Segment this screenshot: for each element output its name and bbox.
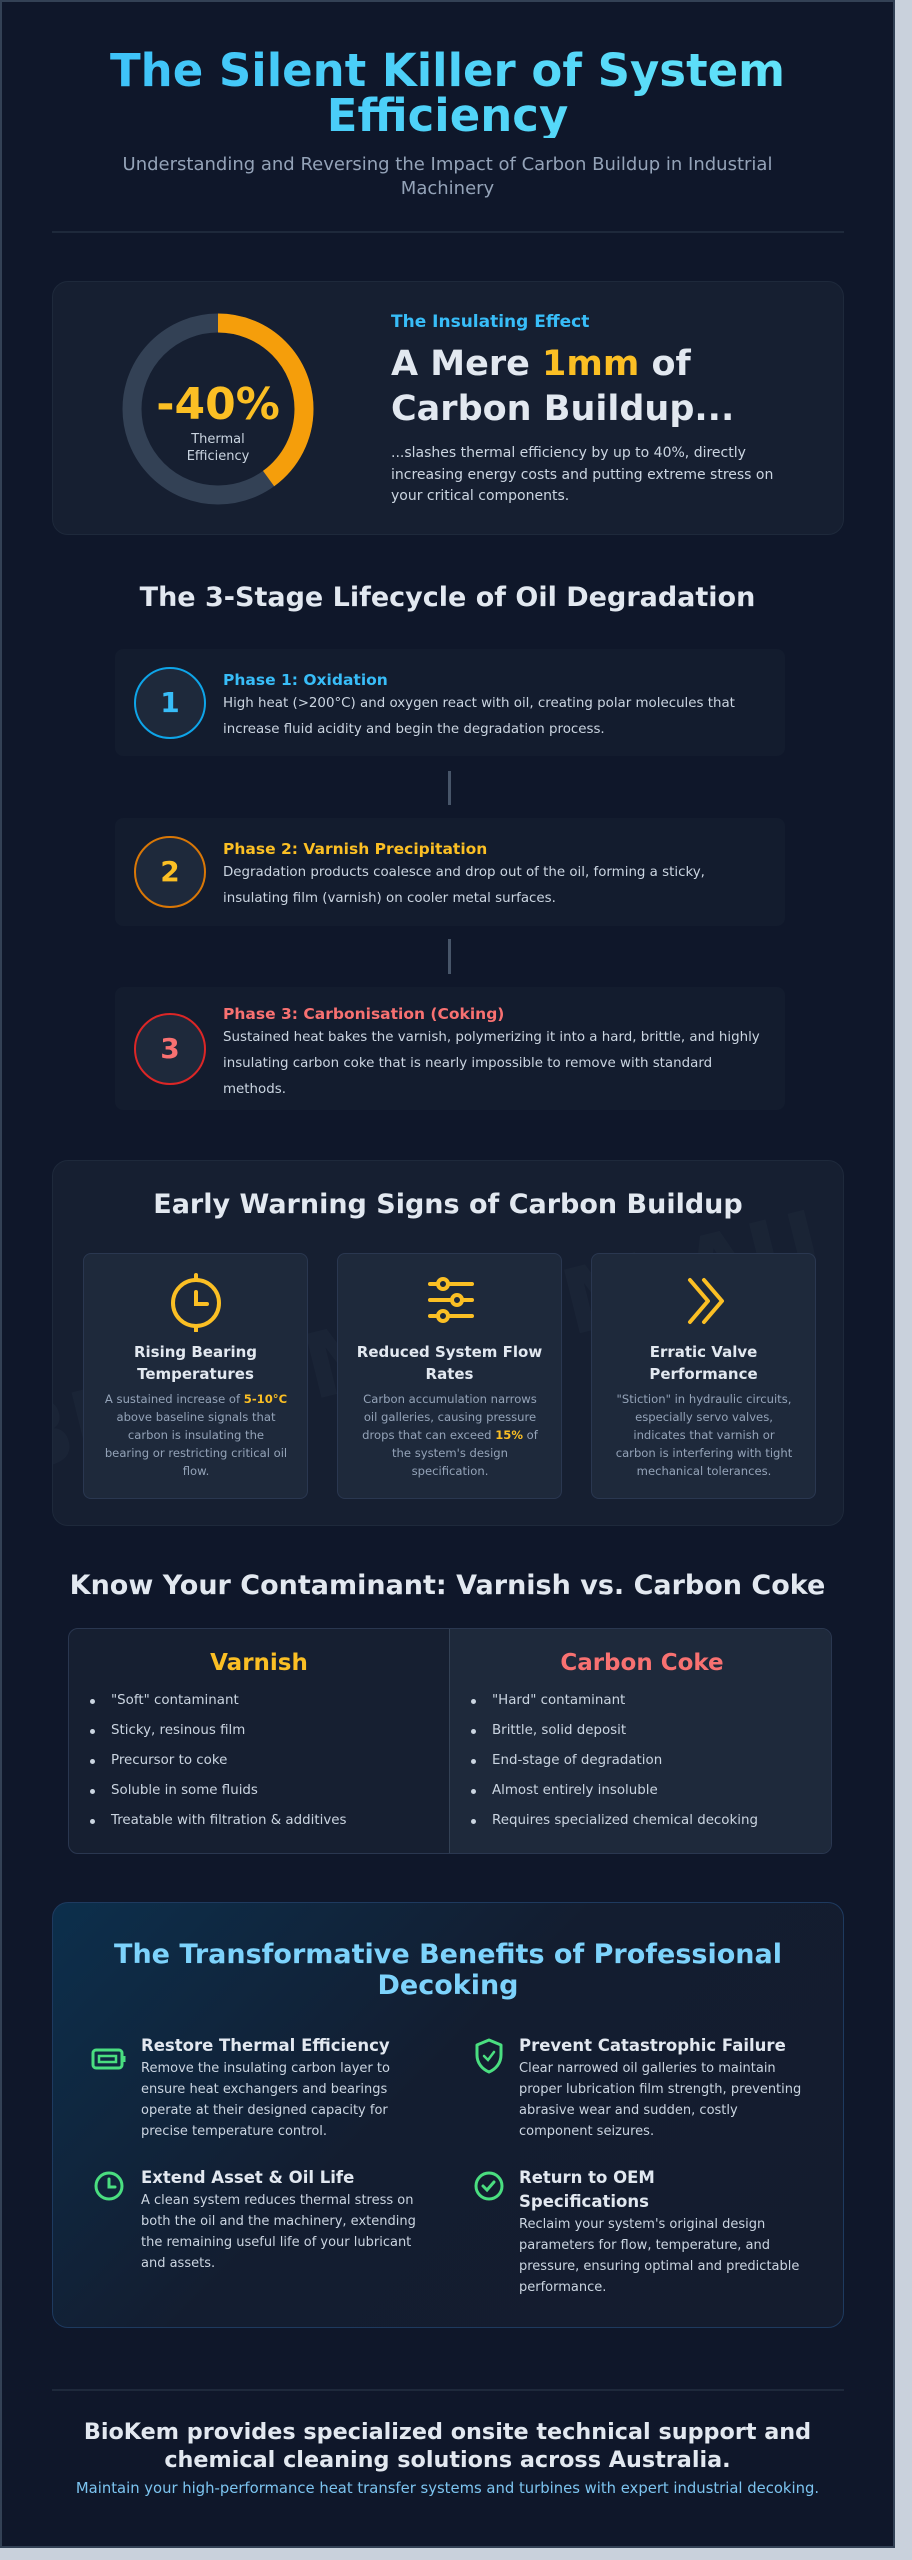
panel: warning signs (52, 1160, 844, 1526)
phase 3: Phase 3: Carbonisation (Coking) (223, 1005, 504, 1023)
card: bearing temperatures: Rising Bearing (134, 1343, 257, 1361)
heading: lifecycle: The 3-Stage Lifecycle of Oil Degradation (140, 582, 755, 613)
icon: clock (171, 1273, 221, 1332)
icon: check circle (474, 2172, 504, 2200)
benefit: prevent failure (476, 2036, 801, 2139)
insulating effect text: The Insulating Effect (391, 312, 589, 332)
column: varnish: Soluble in some fluids (111, 1783, 258, 1798)
comparison table (68, 1628, 832, 1854)
card: flow rates: Rates (426, 1365, 473, 1383)
insulating effect text: A Mere 1mm of (391, 344, 691, 384)
column: carbon coke: Requires specialized chemical decoking (492, 1813, 758, 1828)
donut chart (122, 314, 314, 504)
icon: sliders (428, 1277, 474, 1323)
donut chart: Efficiency (187, 449, 250, 464)
phase 3: Sustained heat bakes the varnish, polymerizing it into a hard, brittle, and highly insulating carbon coke that is nearly impossible to remove with standard methods. (223, 1030, 760, 1097)
phase 3 (115, 987, 785, 1110)
benefit: prevent failure: Clear narrowed oil galleries to maintain proper lubrication film strength, preventing abrasive wear and sudden, costly component seizures. (519, 2061, 801, 2139)
column: varnish: Varnish (210, 1650, 308, 1676)
benefit: extend life: Extend Asset & Oil Life (141, 2168, 354, 2187)
insulating effect text: Carbon Buildup... (391, 389, 734, 429)
icon: clock (94, 2172, 124, 2200)
card: bearing temperatures (83, 1253, 308, 1499)
column: carbon coke: Carbon Coke (560, 1650, 724, 1676)
card: flow rates: Reduced System Flow (357, 1343, 542, 1361)
phase 2 (115, 818, 785, 926)
icon: double chevron (688, 1278, 724, 1324)
panel: benefits (52, 1902, 844, 2328)
phase 2: Degradation products coalesce and drop out of the oil, forming a sticky, insulating film (varnish) on cooler metal surfaces. (223, 865, 705, 906)
card: valve performance: Performance (649, 1365, 758, 1383)
card: valve performance: "Stiction" in hydraulic circuits, especially servo valves, indicates that varnish or carbon is interfering with tight mechanical tolerances. (616, 1392, 792, 1478)
heading: contaminant: Know Your Contaminant: Varnish vs. Carbon Coke (70, 1570, 825, 1601)
panel: insulating effect (52, 281, 844, 535)
insulating effect text: ...slashes thermal efficiency by up to 40%, directly increasing energy costs and putting extreme stress on your critical components. (391, 445, 773, 504)
benefit: thermal efficiency: Remove the insulating carbon layer to ensure heat exchangers and bearings operate at their designed capacity for precise temperature control. (141, 2061, 390, 2139)
benefit: OEM specs: Return to OEM Specifications (519, 2168, 655, 2211)
card: valve performance: Erratic Valve (650, 1343, 757, 1361)
subtitle: Understanding and Reversing the Impact of Carbon Buildup in Industrial Machinery (123, 154, 772, 199)
phase 1: 1 (160, 686, 180, 719)
icon: shield (476, 2038, 502, 2074)
insulating effect text (391, 312, 773, 504)
card: valve performance (591, 1253, 816, 1499)
benefit: extend life (94, 2168, 416, 2271)
connector (448, 771, 451, 805)
column: carbon coke: Almost entirely insoluble (492, 1783, 658, 1798)
card: flow rates: Carbon accumulation narrows oil galleries, causing pressure drops that can exceed 15% of the system's design specification. (362, 1392, 538, 1478)
phase 1: High heat (>200°C) and oxygen react with oil, creating polar molecules that increase fluid acidity and begin the degradation process. (223, 696, 735, 737)
title (2, 48, 893, 138)
column: carbon coke: Brittle, solid deposit (492, 1723, 626, 1738)
heading: warning signs: Early Warning Signs of Carbon Buildup (153, 1189, 743, 1220)
column: carbon coke (449, 1629, 833, 1855)
column: varnish: Sticky, resinous film (111, 1723, 245, 1738)
benefit: thermal efficiency (92, 2036, 390, 2139)
phase 1: Phase 1: Oxidation (223, 671, 388, 689)
footer: Maintain your high-performance heat transfer systems and turbines with expert industrial decoking. (76, 2480, 819, 2497)
phase 1 (115, 649, 785, 756)
card: bearing temperatures: Temperatures (137, 1365, 254, 1383)
icon: battery (92, 2048, 126, 2070)
column: varnish: Treatable with filtration & additives (111, 1813, 346, 1828)
column: carbon coke: "Hard" contaminant (492, 1693, 625, 1708)
connector (448, 939, 451, 974)
phase 2: 2 (160, 855, 180, 888)
phase 3: 3 (160, 1032, 180, 1065)
donut chart: -40% (156, 379, 280, 430)
column: carbon coke: End-stage of degradation (492, 1753, 662, 1768)
column: varnish (90, 1650, 346, 1828)
benefit: thermal efficiency: Restore Thermal Efficiency (141, 2036, 390, 2055)
card: flow rates (337, 1253, 562, 1499)
column: varnish: "Soft" contaminant (111, 1693, 239, 1708)
column: varnish: Precursor to coke (111, 1753, 227, 1768)
donut chart: Thermal (190, 432, 245, 447)
title: Efficiency (327, 89, 568, 142)
benefit: extend life: A clean system reduces thermal stress on both the oil and the machinery, extending the remaining useful life of your lubricant and assets. (141, 2193, 416, 2271)
benefit: OEM specs (474, 2168, 799, 2295)
benefit: prevent failure: Prevent Catastrophic Failure (519, 2036, 786, 2055)
footer: BioKem provides specialized onsite technical support and chemical cleaning solutions across Australia. (84, 2419, 811, 2473)
footer (76, 2419, 819, 2497)
phase 2: Phase 2: Varnish Precipitation (223, 840, 487, 858)
title: The Silent Killer of System (110, 44, 785, 97)
benefit: OEM specs: Reclaim your system's original design parameters for flow, temperature, and pressure, ensuring optimal and predictable performance. (519, 2217, 799, 2295)
card: bearing temperatures: A sustained increase of 5-10°C above baseline signals that carbon is insulating the bearing or restricting critical oil flow. (105, 1392, 287, 1478)
heading: benefits: The Transformative Benefits of Professional Decoking (114, 1939, 782, 2001)
